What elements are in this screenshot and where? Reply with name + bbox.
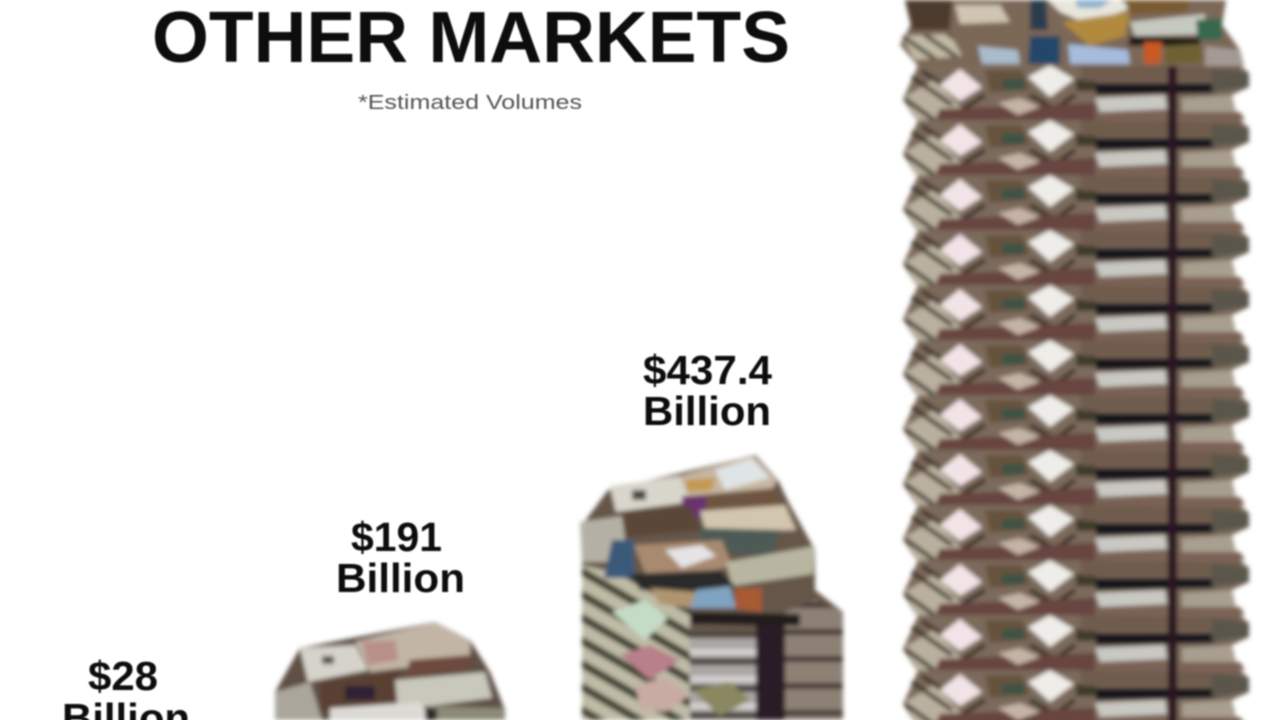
label: $191 Billion: Billion: [336, 555, 465, 601]
money stack: $191 Billion: [275, 622, 505, 720]
label: $191 Billion: [336, 514, 465, 601]
money stack: $437.4 Billion: [580, 455, 843, 720]
repeated bundle rows: [890, 65, 1260, 720]
lower stacked bills, right: [785, 600, 843, 720]
dark centre seam: [756, 620, 785, 720]
money stack: tall, largest market: [890, 0, 1260, 720]
pink and green tints: [612, 600, 750, 716]
top bills: [580, 455, 815, 626]
subtitle: estimated volumes: *Estimated Volumes: [358, 92, 582, 114]
label: $437.4 Billion: [643, 347, 772, 434]
title: OTHER MARKETS: [152, 0, 790, 78]
label: $437.4 Billion: $437.4: [643, 347, 772, 393]
label: $191 Billion: $191: [351, 514, 442, 560]
stack silhouette base: [582, 455, 843, 720]
lower stacked bills, centre: [690, 632, 756, 720]
label: $28 Billion: [62, 653, 190, 720]
label: $437.4 Billion: Billion: [643, 388, 771, 434]
label: $28 Billion: $28: [88, 653, 158, 699]
top of stack: [900, 0, 1244, 66]
lower stacked bills, left: [582, 565, 690, 720]
